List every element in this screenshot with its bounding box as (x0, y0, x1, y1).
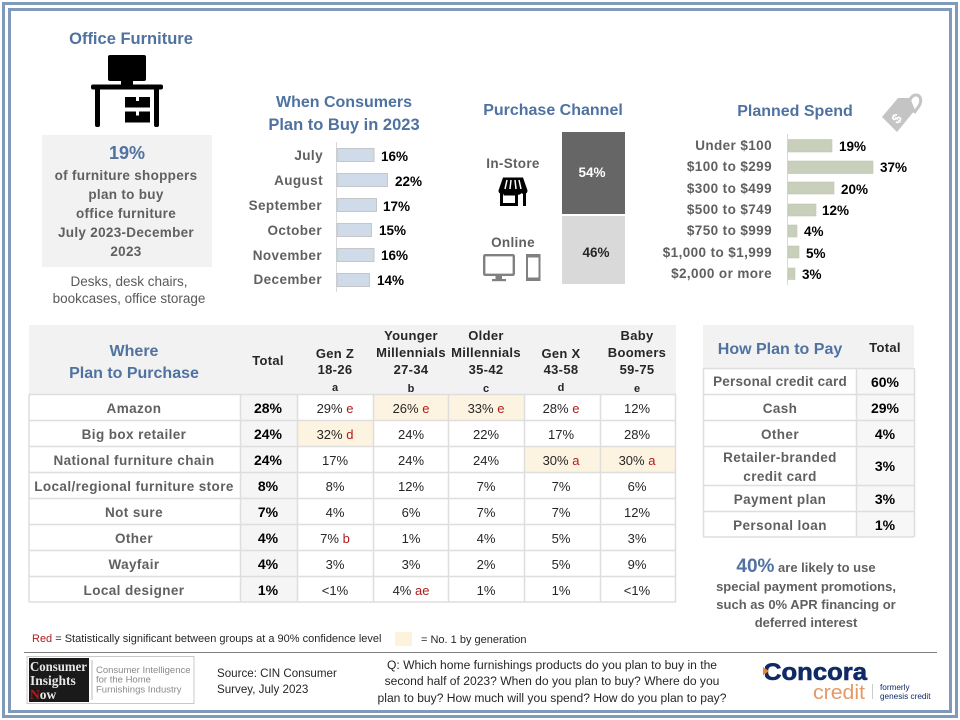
bar chart: planned spend: 4% (804, 224, 824, 239)
row: other (115, 530, 647, 546)
column headers: e (634, 383, 640, 395)
column headers: Millennials (451, 345, 521, 360)
heading: when consumers plan to buy: When Consumers (276, 94, 412, 111)
row: wayfair (108, 556, 647, 572)
column headers: Gen Z (316, 346, 354, 361)
icon: monitor (484, 255, 514, 281)
row: local or regional furniture store: Local/regional furniture store (34, 479, 234, 494)
row: local designer: 1% (552, 583, 571, 598)
bar chart: planned spend: $750 to $999 (687, 223, 772, 238)
row: other: 7% b (320, 531, 350, 546)
row: local designer (84, 582, 651, 598)
heading: how plan to pay: How Plan to Pay (718, 341, 842, 358)
icon: price tag: $ (888, 110, 905, 127)
row: national furniture chain: 30% a (619, 453, 656, 468)
bar chart: planned spend: $300 to $499 (687, 181, 772, 196)
column headers: c (483, 383, 489, 395)
label: in-store: In-Store (486, 156, 540, 171)
row: local or regional furniture store: 12% (398, 479, 424, 494)
column header: total: Total (869, 340, 901, 355)
row: wayfair: 4% (258, 556, 279, 572)
bar chart: planned spend: $1,000 to $1,999 (663, 245, 772, 260)
row: big box retailer: 32% d (317, 427, 353, 442)
row: not sure: 4% (326, 505, 345, 520)
bar chart: purchase months: 16% (381, 248, 408, 263)
column headers: 27-34 (394, 362, 429, 377)
column headers: Millennials (376, 345, 446, 360)
callout: 19 percent of shoppers: of furniture shoppers (55, 168, 197, 183)
row: local or regional furniture store: 7% (552, 479, 571, 494)
logo: concora credit: credit (813, 681, 865, 704)
legend: = No. 1 by generation (421, 634, 526, 646)
row: not sure: Not sure (105, 505, 163, 520)
row: other: 1% (402, 531, 421, 546)
row: local designer: 1% (477, 583, 496, 598)
row: amazon: Amazon (107, 401, 161, 416)
column headers: 35-42 (469, 362, 503, 377)
table: how plan to pay (703, 325, 914, 537)
logo: concora credit: genesis credit (880, 692, 931, 701)
text: product examples (53, 274, 205, 306)
row: local or regional furniture store: 8% (258, 478, 279, 494)
heading: when consumers plan to buy (268, 94, 420, 134)
callout: 19 percent of shoppers: office furniture (76, 206, 176, 221)
bar chart: purchase months: December (254, 272, 322, 287)
text: source: Source: CIN Consumer (217, 667, 337, 680)
logo: consumer insights now: Consumer (30, 659, 87, 674)
table: how plan to pay: 29% (871, 400, 900, 416)
row: big box retailer: 28% (624, 427, 650, 442)
row: local or regional furniture store: 6% (628, 479, 647, 494)
row: local designer: 1% (258, 582, 279, 598)
table: how plan to pay: Retailer-branded (723, 450, 837, 465)
row: local or regional furniture store: 8% (326, 479, 345, 494)
logo: concora credit: Concora (763, 659, 868, 686)
legend: Red = Statistically significant between groups at a 90% confidence level (32, 633, 381, 645)
bar chart: planned spend: 20% (841, 182, 868, 197)
bar chart: planned spend: 19% (839, 139, 866, 154)
legend (32, 632, 526, 646)
row: big box retailer (82, 426, 650, 442)
heading: office furniture: Office Furniture (69, 30, 193, 48)
row: big box retailer: Big box retailer (82, 427, 187, 442)
table: how plan to pay: 4% (875, 426, 896, 442)
column headers: Total (252, 353, 284, 368)
row: amazon (107, 400, 650, 416)
callout: special payment promotions (716, 556, 896, 630)
column headers: Younger (384, 328, 438, 343)
heading: where plan to purchase (69, 343, 199, 382)
row: not sure (105, 504, 650, 520)
table: how plan to pay: 1% (875, 517, 896, 533)
logo: consumer insights now: Insights (30, 673, 76, 688)
row: amazon: 26% e (393, 401, 429, 416)
row: big box retailer: 17% (548, 427, 574, 442)
label: online: Online (491, 235, 535, 250)
text: survey questions (378, 658, 727, 705)
callout: 19 percent of shoppers: 2023 (110, 244, 142, 259)
heading: purchase channel: Purchase Channel (483, 102, 623, 119)
icon: desk with monitor (91, 55, 163, 127)
row: local designer: <1% (624, 583, 651, 598)
row: wayfair: 2% (477, 557, 496, 572)
column headers: Boomers (608, 345, 666, 360)
table: how plan to pay: 3% (875, 458, 896, 474)
callout: 19 percent of shoppers (42, 135, 212, 267)
heading: where plan to purchase: Plan to Purchase (69, 365, 199, 382)
row: wayfair: 3% (402, 557, 421, 572)
text: survey questions: plan to buy? How much will you spend? How do you plan to pay? (378, 691, 727, 705)
callout: special payment promotions: 40% are likely to use (736, 556, 876, 577)
column headers: Gen X (541, 346, 581, 361)
bar chart: purchase months: 15% (379, 223, 406, 238)
column headers (252, 328, 666, 395)
row: other: 4% (477, 531, 496, 546)
stacked bar: channel split: 54% (578, 165, 606, 180)
bar chart: purchase months: July (294, 148, 323, 163)
text: survey questions: second half of 2023? When do you plan to buy? Where do you (385, 674, 719, 688)
logo: consumer insights now: Now (30, 687, 56, 702)
row: not sure: 7% (477, 505, 496, 520)
table: how plan to pay: Payment plan (734, 492, 826, 507)
heading: where plan to purchase: Where (110, 343, 159, 360)
row: not sure: 6% (402, 505, 421, 520)
table: how plan to pay: Personal loan (733, 518, 827, 533)
row: national furniture chain (53, 452, 656, 468)
callout: 19 percent of shoppers: 19% (109, 143, 145, 163)
row: local designer: Local designer (84, 583, 185, 598)
bar chart: purchase months: November (253, 248, 322, 263)
row: not sure: 7% (258, 504, 279, 520)
row: amazon: 28% (254, 400, 283, 416)
row: not sure: 12% (624, 505, 650, 520)
bar chart: purchase months: October (267, 223, 322, 238)
bar chart: purchase months: August (274, 173, 323, 188)
panel: office furniture (42, 30, 212, 306)
table: how plan to pay: credit card (743, 469, 817, 484)
column headers: d (558, 382, 564, 394)
table: how plan to pay: Personal credit card (713, 374, 847, 389)
heading: planned spend: Planned Spend (737, 103, 853, 120)
icon: storefront (498, 178, 528, 206)
row: other: 5% (552, 531, 571, 546)
row: wayfair: 9% (628, 557, 647, 572)
text: product examples: Desks, desk chairs, (70, 274, 188, 289)
callout: 19 percent of shoppers: July 2023-December (58, 225, 194, 240)
row: wayfair: Wayfair (108, 557, 160, 572)
heading: when consumers plan to buy: Plan to Buy in 2023 (268, 116, 420, 134)
bar chart: purchase months: 17% (383, 199, 410, 214)
bar chart: purchase months: 22% (395, 174, 422, 189)
table: how plan to pay: Cash (763, 401, 797, 416)
row: big box retailer: 22% (473, 427, 499, 442)
row: local or regional furniture store (34, 478, 647, 494)
row: amazon: 29% e (317, 401, 353, 416)
row: national furniture chain: 24% (473, 453, 499, 468)
logo: concora credit: formerly (880, 683, 910, 692)
column headers: Baby (620, 328, 654, 343)
bar chart: purchase months: September (249, 198, 322, 213)
bar chart: purchase months: 16% (381, 149, 408, 164)
callout: 19 percent of shoppers: plan to buy (88, 187, 164, 202)
bar chart: purchase months: 14% (377, 273, 404, 288)
column headers: 18-26 (318, 362, 352, 377)
column headers: a (332, 382, 339, 394)
column headers: b (408, 383, 415, 395)
row: wayfair: 3% (326, 557, 345, 572)
text: source: Survey, July 2023 (217, 683, 308, 696)
row: amazon: 12% (624, 401, 650, 416)
row: wayfair: 5% (552, 557, 571, 572)
row: big box retailer: 24% (398, 427, 424, 442)
panel: purchase channel (483, 102, 625, 284)
row: national furniture chain: 24% (398, 453, 424, 468)
bar chart: planned spend: $500 to $749 (687, 202, 772, 217)
callout: special payment promotions: special payment promotions, (716, 579, 896, 594)
row: not sure: 7% (552, 505, 571, 520)
logo: consumer insights now: Consumer Intelligence (96, 665, 191, 676)
logo: concora credit (762, 659, 931, 704)
panel: when consumers plan to buy (249, 94, 422, 292)
row: other: 3% (628, 531, 647, 546)
callout: special payment promotions: such as 0% APR financing or (716, 597, 896, 612)
logo: consumer insights now: Furnishings Industry (96, 684, 182, 696)
column headers: Older (468, 328, 504, 343)
row: amazon: 28% e (543, 401, 579, 416)
callout: special payment promotions: deferred interest (755, 615, 858, 630)
row: national furniture chain: 17% (322, 453, 348, 468)
icon: smartphone (526, 254, 540, 281)
column headers: 59-75 (620, 362, 654, 377)
row: national furniture chain: 30% a (543, 453, 580, 468)
bar chart: planned spend: 37% (880, 160, 907, 175)
row: local designer: <1% (322, 583, 349, 598)
bar chart: planned spend: $2,000 or more (671, 266, 772, 281)
row: amazon: 33% e (468, 401, 504, 416)
text: product examples: bookcases, office storage (53, 291, 205, 306)
icon: price tag (882, 95, 921, 132)
bar chart: planned spend: $100 to $299 (687, 159, 772, 174)
column headers: 43-58 (544, 362, 578, 377)
logo: consumer insights now (27, 656, 194, 704)
table: how plan to pay: Other (761, 427, 799, 442)
panel: planned spend (663, 95, 921, 285)
text: survey questions: Q: Which home furnishings products do you plan to buy in the (387, 658, 717, 672)
bar chart: planned spend: 5% (806, 246, 826, 261)
table: where plan to purchase (29, 325, 676, 602)
bar chart: purchase months (249, 142, 422, 292)
bar chart: planned spend: Under $100 (695, 138, 772, 153)
row: other: Other (115, 531, 153, 546)
bar chart: planned spend: 12% (822, 203, 849, 218)
row: other: 4% (258, 530, 279, 546)
row: national furniture chain: National furniture chain (53, 453, 215, 468)
bar chart: planned spend: 3% (802, 267, 822, 282)
table: how plan to pay: 3% (875, 491, 896, 507)
text: source (217, 667, 337, 696)
row: local or regional furniture store: 7% (477, 479, 496, 494)
stacked bar: channel split: 46% (582, 245, 610, 260)
row: local designer: 4% ae (393, 583, 429, 598)
table: how plan to pay: 60% (871, 374, 900, 390)
row: big box retailer: 24% (254, 426, 283, 442)
logo: consumer insights now: for the Home (96, 674, 151, 686)
row: national furniture chain: 24% (254, 452, 283, 468)
bar chart: planned spend (663, 134, 907, 285)
stacked bar: channel split (562, 132, 625, 284)
